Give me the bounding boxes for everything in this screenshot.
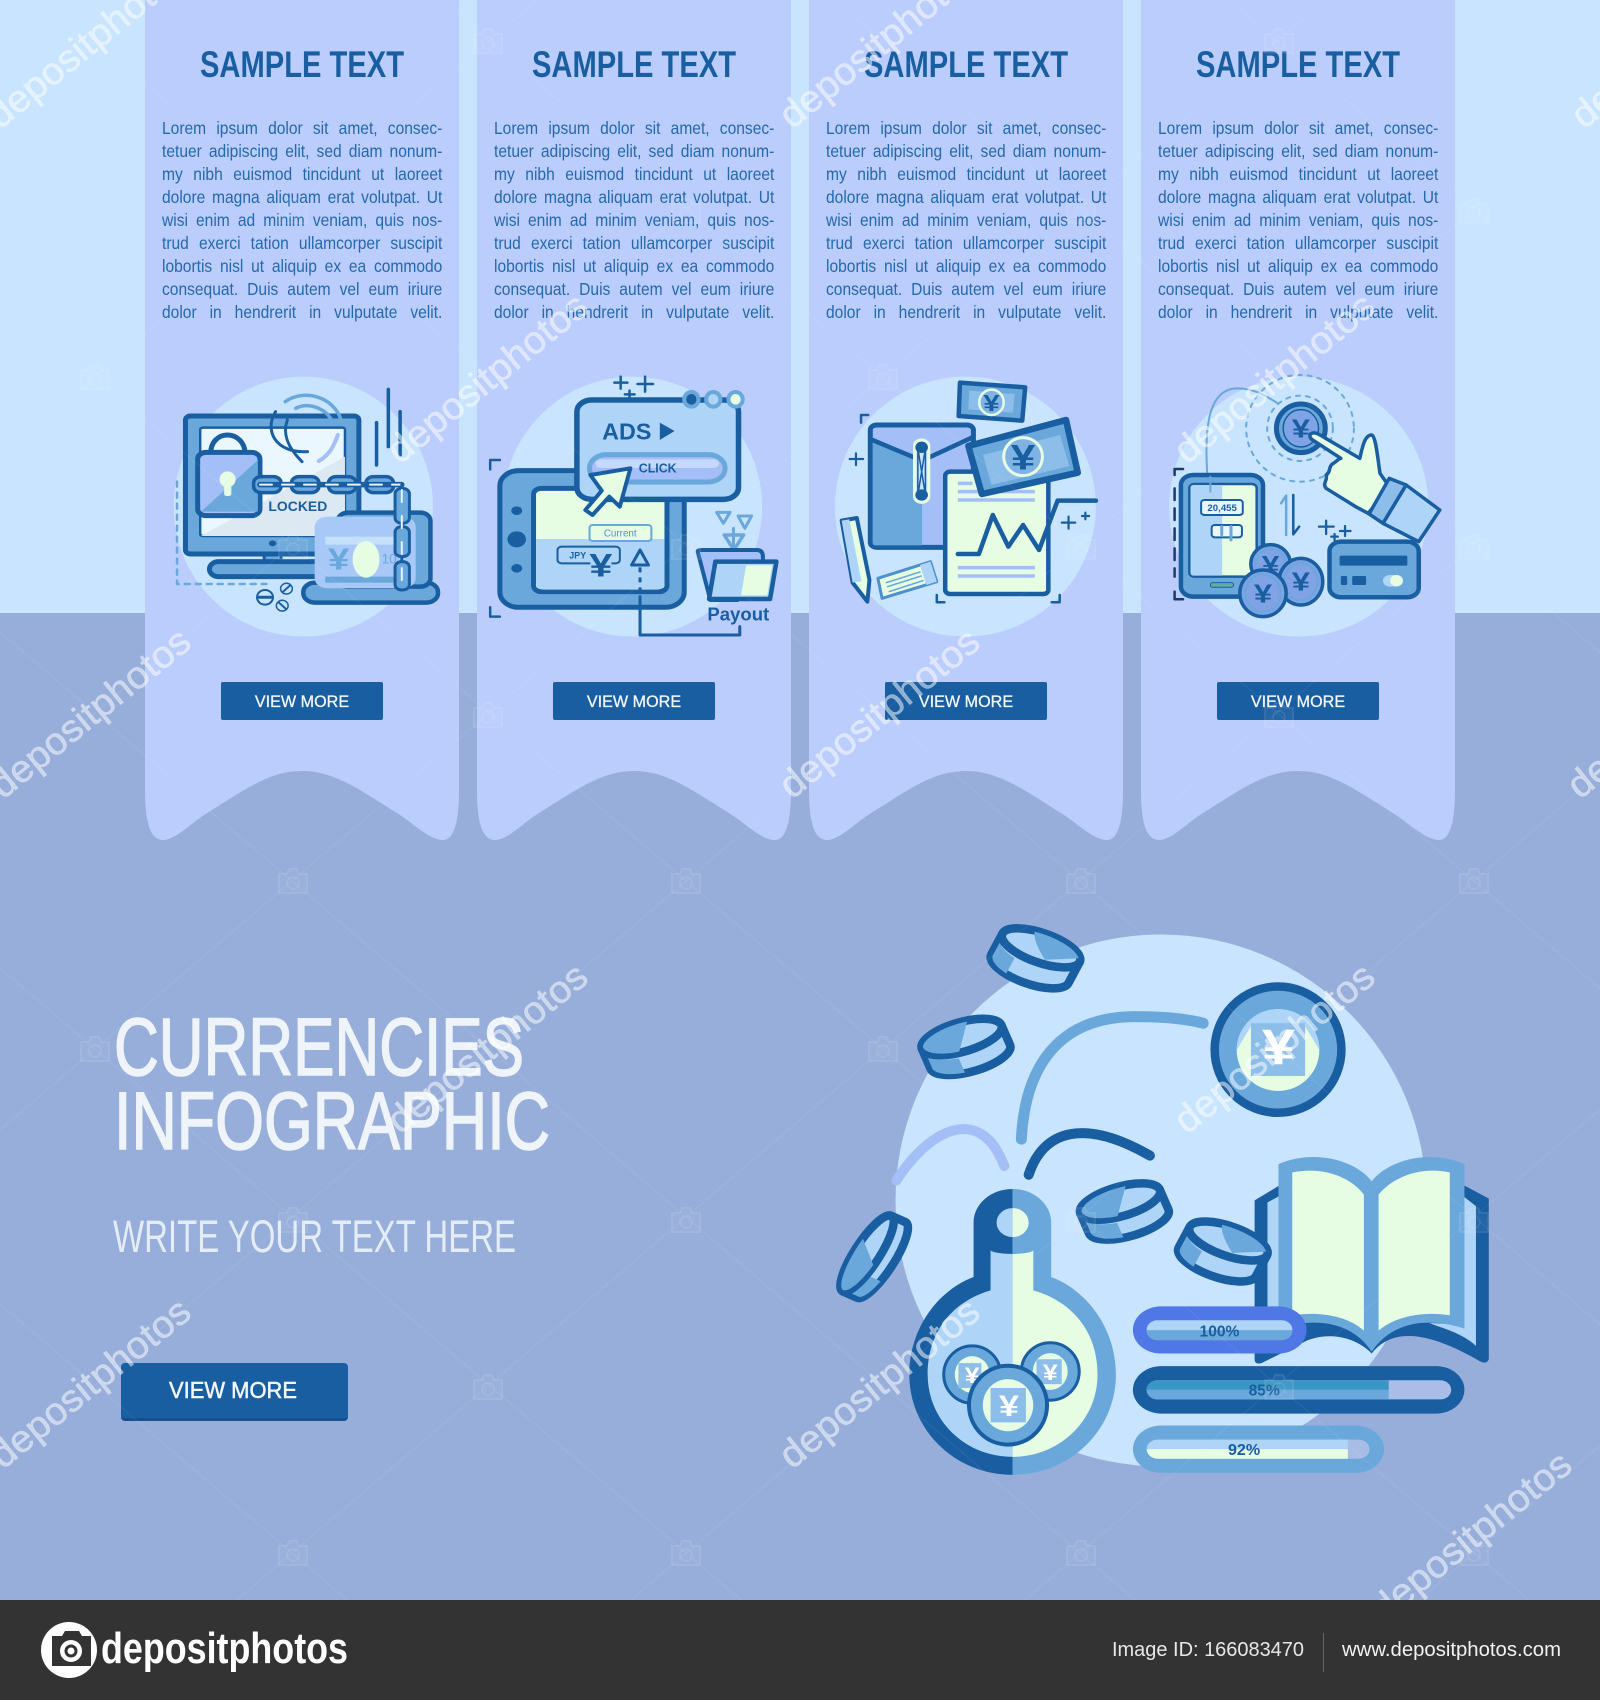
icon: flying coin 2 <box>916 1011 1016 1082</box>
text block: wisi enim ad minim veniam, quis nos- <box>826 210 1106 230</box>
text block: tetuer adipiscing elit, sed diam nonum- <box>494 141 774 161</box>
heading: SAMPLE TEXT <box>864 44 1068 85</box>
text block: trud exerci tation ullamcorper suscipit <box>162 233 442 253</box>
icon: touched coin <box>1276 404 1325 453</box>
text block: Lorem ipsum dolor sit amet, consec- <box>162 118 442 138</box>
footer bar <box>0 1600 1600 1700</box>
heading: SAMPLE TEXT <box>532 44 736 85</box>
text block: lobortis nisl ut aliquip ex ea commodo <box>826 256 1106 276</box>
icon: depositphotos logo <box>41 1622 97 1678</box>
label: LOCKED: LOCKED <box>268 500 327 514</box>
watermark text: depositphotos <box>771 1290 988 1477</box>
text block: wisi enim ad minim veniam, quis nos- <box>162 210 442 230</box>
text block: lobortis nisl ut aliquip ex ea commodo <box>162 256 442 276</box>
icon: flying coin 4 <box>1172 1213 1274 1290</box>
text block: my nibh euismod tincidunt ut laoreet <box>826 164 1106 184</box>
text block: tetuer adipiscing elit, sed diam nonum- <box>826 141 1106 161</box>
button <box>885 682 1047 720</box>
illustration: ads window, tablet and payout folder <box>488 375 779 636</box>
text block: trud exerci tation ullamcorper suscipit <box>1158 233 1438 253</box>
label: 20,455 <box>1201 500 1243 515</box>
watermark text: depositphotos <box>1363 1443 1580 1630</box>
text block: dolor in hendrerit in vulputate velit. <box>1158 302 1438 322</box>
icon: flask with coins <box>909 1189 1116 1475</box>
button: VIEW MORE <box>919 692 1013 711</box>
label: Current <box>590 525 651 541</box>
watermark text: depositphotos <box>379 955 596 1142</box>
text block: trud exerci tation ullamcorper suscipit <box>494 233 774 253</box>
text block: dolore magna aliquam erat volutpat. Ut <box>162 187 442 207</box>
icon: flying coin 1 <box>984 920 1087 996</box>
icon: bank card <box>1329 542 1419 597</box>
icon: flying coin 3 <box>1074 1176 1174 1247</box>
main button <box>121 1363 348 1421</box>
website: www.depositphotos.com <box>1341 1639 1561 1661</box>
progress bar 85% <box>1133 1366 1464 1414</box>
text block: dolore magna aliquam erat volutpat. Ut <box>826 187 1106 207</box>
watermark text: depositphotos <box>771 620 988 807</box>
panel: card 1 locked <box>145 0 459 840</box>
icon: flask with coins: ¥ <box>999 1389 1020 1422</box>
progress bar 92% <box>1133 1425 1384 1473</box>
motion arcs <box>896 1017 1203 1181</box>
main illustration: currency flask, coins, book and progress bars <box>836 924 1489 1475</box>
icon: coins: ¥ <box>1254 579 1273 608</box>
text block: Lorem ipsum dolor sit amet, consec- <box>1158 118 1438 138</box>
illustration: locked computer and chained banknote <box>174 376 440 636</box>
text block: tetuer adipiscing elit, sed diam nonum- <box>162 141 442 161</box>
text block: consequat. Duis autem vel eum iriure <box>494 279 774 299</box>
panel: card 2 ads <box>477 0 791 840</box>
text block: wisi enim ad minim veniam, quis nos- <box>494 210 774 230</box>
button <box>553 682 715 720</box>
text block: wisi enim ad minim veniam, quis nos- <box>1158 210 1438 230</box>
text block: dolor in hendrerit in vulputate velit. <box>494 302 774 322</box>
label: Current: Current <box>604 529 637 539</box>
card shape <box>1141 0 1455 840</box>
image id: Image ID: 166083470 <box>1112 1639 1304 1661</box>
card shape <box>145 0 459 840</box>
illustration: locked computer and chained banknote: ¥ <box>328 542 350 576</box>
label: Payout: Payout <box>707 604 769 625</box>
card shape <box>477 0 791 840</box>
illustration: ads window, tablet and payout folder: ¥ <box>589 547 613 584</box>
text block: my nibh euismod tincidunt ut laoreet <box>494 164 774 184</box>
icon: touched coin: ¥ <box>1292 414 1311 443</box>
progress bar 85%: 85% <box>1249 1381 1280 1399</box>
icon: big yen coin: ¥ <box>1262 1019 1296 1075</box>
watermark text: depositphotos <box>1166 285 1383 472</box>
progress bar 100%: 100% <box>1200 1322 1240 1340</box>
label: 20,455: 20,455 <box>1207 503 1237 514</box>
text block: consequat. Duis autem vel eum iriure <box>826 279 1106 299</box>
icon: large banknote <box>968 420 1078 494</box>
icon: open book <box>1255 1157 1489 1364</box>
text block: lobortis nisl ut aliquip ex ea commodo <box>494 256 774 276</box>
button <box>221 682 383 720</box>
label: JPY <box>558 547 620 563</box>
text block: tetuer adipiscing elit, sed diam nonum- <box>1158 141 1438 161</box>
button <box>1217 682 1379 720</box>
text block: consequat. Duis autem vel eum iriure <box>1158 279 1438 299</box>
text block: dolor in hendrerit in vulputate velit. <box>162 302 442 322</box>
illustration: locked computer and chained banknote: 10 <box>382 552 397 567</box>
illustration: envelope, banknotes and chart document <box>835 376 1098 636</box>
text block <box>1158 118 1438 322</box>
watermark text: depositphotos <box>379 285 596 472</box>
text block: lobortis nisl ut aliquip ex ea commodo <box>1158 256 1438 276</box>
icon: flask with coins: ¥ <box>1043 1361 1058 1385</box>
panel: card 4 mobile payment <box>1141 0 1455 840</box>
text block: Lorem ipsum dolor sit amet, consec- <box>826 118 1106 138</box>
illustration: phone, coins, bank card and hand <box>1169 374 1442 636</box>
main button: VIEW MORE <box>169 1377 297 1403</box>
watermark camera icons <box>81 29 1488 1565</box>
heading: SAMPLE TEXT <box>1196 44 1400 85</box>
label: CLICK: CLICK <box>639 462 677 476</box>
text block: consequat. Duis autem vel eum iriure <box>162 279 442 299</box>
main title: INFOGRAPHIC <box>114 1076 550 1167</box>
text block: trud exerci tation ullamcorper suscipit <box>826 233 1106 253</box>
text block: my nibh euismod tincidunt ut laoreet <box>162 164 442 184</box>
icon: coins <box>1240 545 1323 617</box>
text block: dolor in hendrerit in vulputate velit. <box>826 302 1106 322</box>
text block: Lorem ipsum dolor sit amet, consec- <box>494 118 774 138</box>
label: ADS: ADS <box>602 418 651 445</box>
icon: pointing hand <box>1310 433 1440 542</box>
horizontal chain <box>254 477 409 590</box>
text block: dolore magna aliquam erat volutpat. Ut <box>1158 187 1438 207</box>
main title <box>114 1002 550 1167</box>
progress bar 100% <box>1133 1306 1306 1353</box>
icon: large banknote: ¥ <box>1011 439 1035 477</box>
brand name: depositphotos <box>101 1624 348 1673</box>
icon: small banknote: ¥ <box>983 390 1000 416</box>
panel: card 3 finance documents <box>809 0 1123 840</box>
main title: CURRENCIES <box>114 1002 524 1093</box>
text block: dolore magna aliquam erat volutpat. Ut <box>494 187 774 207</box>
label: JPY: JPY <box>569 550 586 561</box>
button: VIEW MORE <box>255 692 349 711</box>
button: VIEW MORE <box>1251 692 1345 711</box>
subtitle: WRITE YOUR TEXT HERE <box>113 1211 516 1262</box>
icon: small banknote <box>959 383 1025 421</box>
watermark text: depositphotos <box>1166 955 1383 1142</box>
progress bar 92%: 92% <box>1228 1440 1260 1459</box>
text block <box>826 118 1106 322</box>
icon: coins: ¥ <box>1292 568 1311 597</box>
icon: flask with coins: ¥ <box>965 1364 980 1388</box>
button: VIEW MORE <box>587 692 681 711</box>
text block <box>494 118 774 322</box>
icon: coins: ¥ <box>1262 551 1280 579</box>
text block <box>162 118 442 322</box>
card shape <box>809 0 1123 840</box>
heading: SAMPLE TEXT <box>200 44 404 85</box>
icon: big yen coin <box>1215 986 1341 1113</box>
icon: flying coin 5 <box>832 1211 917 1303</box>
text block: my nibh euismod tincidunt ut laoreet <box>1158 164 1438 184</box>
